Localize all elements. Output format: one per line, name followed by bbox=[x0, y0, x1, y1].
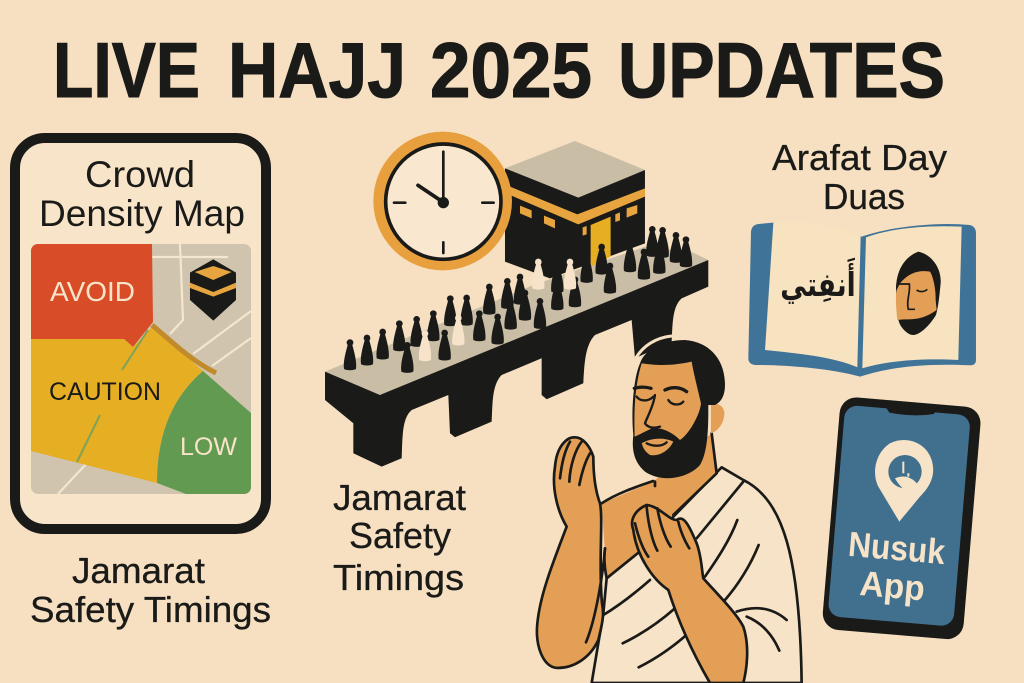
robe folds bbox=[603, 482, 787, 667]
caption: jamarat safety timings centre bbox=[333, 477, 466, 598]
bridge bbox=[325, 247, 708, 467]
title: 2025 bbox=[430, 26, 592, 114]
caption: jamarat safety timings centre: Jamarat bbox=[333, 477, 466, 518]
mouth bbox=[642, 439, 673, 455]
app name: App bbox=[858, 564, 926, 608]
left page bbox=[765, 222, 861, 367]
illustration: bridge, kaaba and clock bbox=[325, 132, 708, 467]
app name bbox=[843, 525, 947, 610]
caption: arafat day duas: Arafat Day bbox=[772, 137, 947, 178]
facial features bbox=[634, 387, 687, 392]
map label: avoid: AVOID bbox=[50, 276, 135, 307]
zone border and streams bbox=[77, 325, 216, 462]
map label: low: LOW bbox=[180, 433, 237, 461]
ear bbox=[711, 404, 724, 433]
panel heading: Density Map bbox=[39, 193, 245, 234]
caption: arafat day duas bbox=[772, 137, 947, 217]
icon: nusuk app phone bbox=[821, 396, 982, 640]
hair and beard bbox=[632, 340, 725, 478]
panel: crowd density map bbox=[15, 138, 266, 529]
caption: jamarat safety timings left bbox=[30, 550, 271, 630]
title bbox=[53, 26, 945, 114]
icon: location pin bbox=[875, 440, 933, 522]
pilgrims front row bbox=[401, 330, 451, 373]
map bbox=[31, 244, 251, 494]
caption: jamarat safety timings left: Jamarat bbox=[72, 550, 205, 591]
map label: caution: CAUTION bbox=[49, 378, 161, 406]
head bbox=[632, 336, 725, 478]
phone screen bbox=[828, 405, 971, 627]
illustration: praying pilgrim bbox=[537, 336, 802, 683]
panel frame bbox=[15, 138, 266, 529]
panel heading bbox=[39, 154, 245, 234]
right hand and arm bbox=[632, 505, 747, 683]
zone: avoid bbox=[31, 244, 153, 347]
panel heading: Crowd bbox=[85, 154, 195, 195]
arabic text on page: أَنفِتي bbox=[780, 257, 856, 305]
app name: Nusuk bbox=[847, 525, 947, 572]
portrait on page bbox=[896, 252, 941, 335]
caption: arafat day duas: Duas bbox=[823, 176, 905, 217]
phone body bbox=[821, 396, 982, 640]
face bbox=[634, 362, 701, 440]
icon: clock bbox=[373, 132, 512, 270]
neck and chest bbox=[602, 433, 717, 578]
ihram robe bbox=[592, 467, 802, 683]
book cover bbox=[748, 223, 976, 377]
raised left hand and arm bbox=[537, 437, 603, 668]
title: UPDATES bbox=[618, 26, 945, 114]
zone: low bbox=[157, 371, 251, 494]
right page bbox=[862, 226, 962, 368]
map base with roads bbox=[31, 244, 251, 494]
icon: open book bbox=[748, 222, 976, 377]
title: HAJJ bbox=[228, 26, 406, 114]
phone notch bbox=[883, 403, 937, 415]
caption: jamarat safety timings left: Safety Timings bbox=[30, 589, 271, 630]
pilgrims crowd bbox=[344, 226, 692, 370]
caption: jamarat safety timings centre: Safety bbox=[349, 515, 451, 556]
caption: jamarat safety timings centre: Timings bbox=[333, 557, 464, 598]
icon: kaaba on map bbox=[190, 259, 236, 321]
title: LIVE bbox=[53, 26, 200, 114]
kaaba bbox=[505, 141, 645, 278]
pilgrims in white bbox=[419, 259, 576, 361]
zone: caution bbox=[31, 327, 203, 483]
halo over bridge bbox=[636, 336, 672, 358]
